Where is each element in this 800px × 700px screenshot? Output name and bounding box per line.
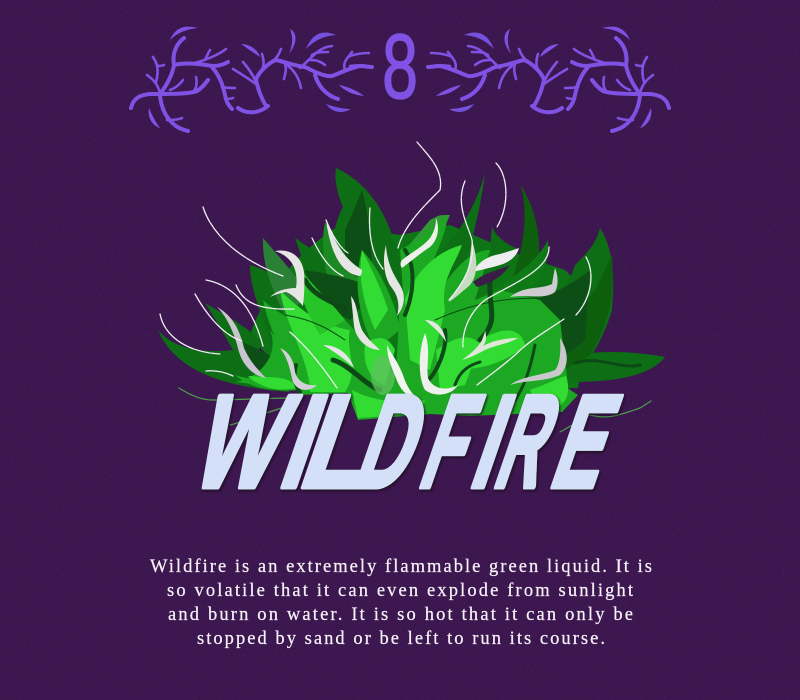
title: WILDFIRE (178, 367, 637, 516)
illustration: green wildfire flames (158, 142, 665, 432)
white flame streaks (217, 218, 567, 398)
title: WILDFIRE: I (266, 369, 342, 516)
description text: so volatile that it can even explode from sunlight (167, 581, 634, 601)
thin green ground lines (179, 388, 651, 432)
dark outer flame tongues (158, 168, 665, 395)
bright green highlights (248, 245, 568, 418)
title: WILDFIRE: F (406, 369, 497, 516)
second branch (238, 106, 268, 112)
description text (150, 557, 652, 649)
thin white wisps (160, 142, 591, 388)
base silhouette (250, 225, 595, 394)
purple gaps and speckle (371, 265, 510, 395)
description text: Wildfire is an extremely flammable green liquid. It is (150, 557, 652, 577)
ornament: left antler branches (131, 27, 372, 131)
ornament: number 8: 8 (382, 15, 418, 118)
title: WILDFIRE: L (286, 368, 400, 515)
title: WILDFIRE: E (537, 367, 637, 515)
title: WILDFIRE: D (341, 368, 445, 515)
description text: and burn on water. It is so hot that it can only be (168, 605, 633, 625)
dark brush accents (285, 250, 640, 400)
mid green body (235, 215, 578, 420)
title: WILDFIRE: R (481, 367, 577, 515)
title: WILDFIRE: W (178, 368, 311, 515)
description text: stopped by sand or be left to run its course. (197, 629, 605, 649)
title: WILDFIRE: I (457, 368, 530, 516)
ornament: right antler branches (428, 27, 669, 131)
dark shadow masses (235, 190, 590, 380)
